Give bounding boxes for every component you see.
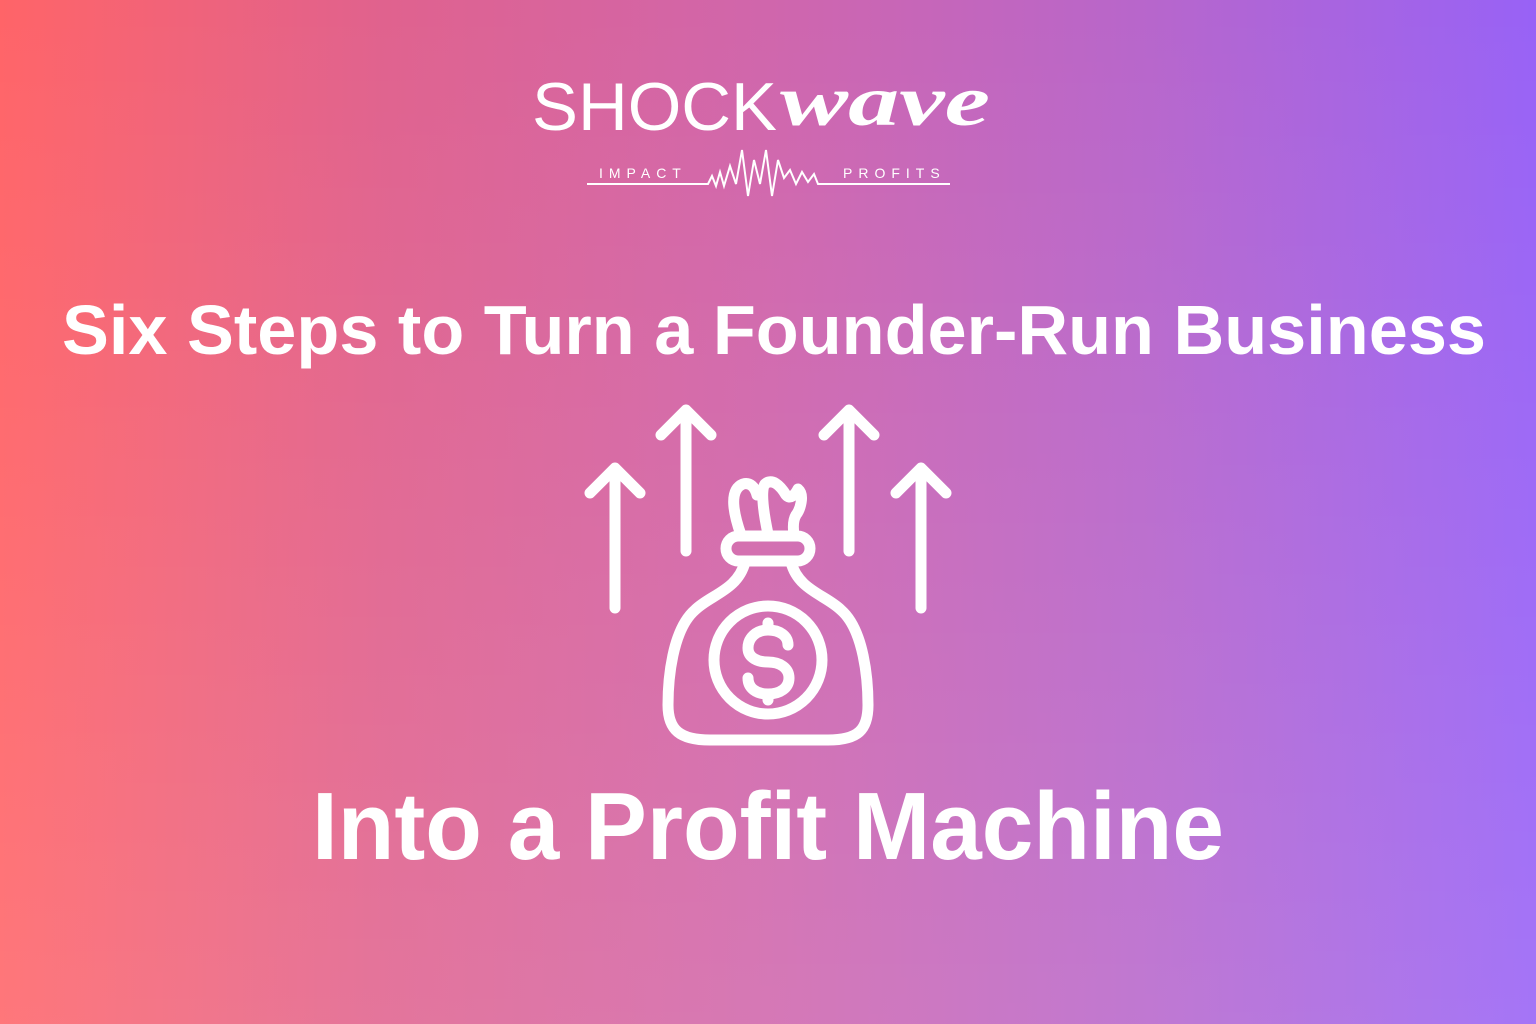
title line 1: Six Steps to Turn a Founder-Run Business [62,291,1486,369]
logo: IMPACT [599,165,687,181]
logo [532,61,990,196]
logo: SHOCK [532,69,777,145]
logo: wave [780,61,990,141]
title line 2: Into a Profit Machine [312,773,1224,880]
logo: PROFITS [843,165,946,181]
icon: money bag with arrows [590,410,946,740]
